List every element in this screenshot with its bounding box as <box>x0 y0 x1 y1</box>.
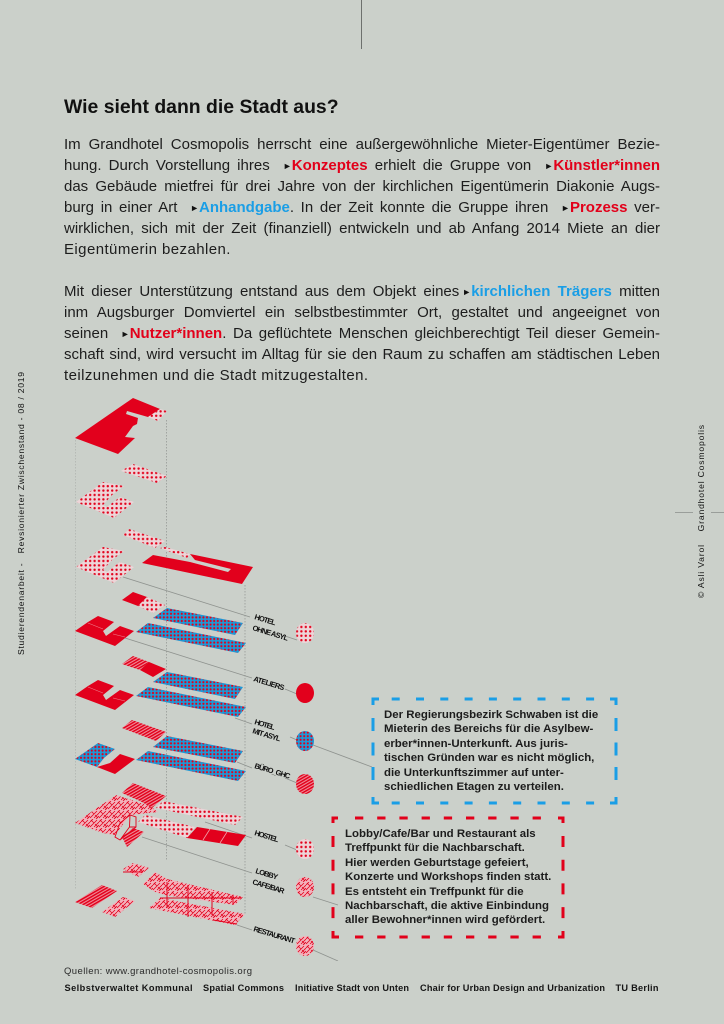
legend labels: BÜRO_GHC <box>253 761 292 781</box>
side note right: © Asli Varol Grandhotel Cosmopolis <box>696 425 706 598</box>
legend labels: LOBBY <box>254 866 279 882</box>
partner list: TU Berlin <box>616 983 659 993</box>
floor: hostel and lobby <box>75 783 246 847</box>
partner list <box>64 983 659 993</box>
text block: first paragraph: wirklichen, sich mit der Zeit (finanziell) entwickeln und ab Anfang 2014 Miete an dier <box>64 220 660 237</box>
callout frame: red <box>333 818 563 937</box>
callout text: Regierungsbezirk Schwaben: schiedlichen Etagen zu verteilen. <box>384 781 564 793</box>
partner list: Selbstverwaltet Kommunal <box>64 983 192 993</box>
callout text: Lobby Cafe Bar <box>345 828 551 926</box>
callout frame: blue <box>373 699 616 803</box>
callout text: Regierungsbezirk Schwaben: die Unterkunftszimmer auf unter- <box>384 767 564 779</box>
legend labels: HOTEL <box>253 717 277 732</box>
callout text: Lobby Cafe Bar: Lobby/Cafe/Bar und Restaurant als <box>345 828 536 840</box>
text block: second paragraph: teilzunehmen und die Stadt mitzugestalten. <box>64 367 368 384</box>
text block: first paragraph: hung. Durch Vorstellung ihres ►Konzeptes erhielt die Gruppe von ►Künstler*innen <box>64 157 660 174</box>
exploded isometric building diagram <box>75 398 372 961</box>
legend labels: MIT ASYL <box>251 726 282 744</box>
callout text: Regierungsbezirk Schwaben <box>384 709 598 793</box>
partner list: Spatial Commons <box>203 983 284 993</box>
text block: second paragraph: schaft sind, wird versucht im Alltag für sie den Raum zu schaffen am städtischen Leben <box>64 346 660 363</box>
floor: dotted <box>76 464 167 518</box>
text block: second paragraph <box>64 283 660 384</box>
callout text: Lobby Cafe Bar: aller Bewohner*innen wird gefördert. <box>345 914 545 926</box>
sources line: Quellen: www.grandhotel-cosmopolis.org <box>64 966 252 977</box>
legend labels: ATELIERS <box>252 674 286 692</box>
legend swatches <box>296 623 314 956</box>
roof level <box>75 398 167 454</box>
callout text: Lobby Cafe Bar: Treffpunkt für die Nachbarschaft. <box>345 842 525 854</box>
legend labels: RESTAURANT <box>252 924 297 946</box>
floor: blue and red wing <box>75 720 246 781</box>
legend labels <box>251 612 297 946</box>
text block: first paragraph: das Gebäude mietfrei für drei Jahre von der kirchlichen Eigentümerin Diakonie Augs- <box>64 178 660 195</box>
text block: first paragraph: burg in einer Art ►Anhandgabe. In der Zeit konnte die Gruppe ihren ►Prozess ver- <box>64 199 660 216</box>
callout text: Regierungsbezirk Schwaben: Der Regierungsbezirk Schwaben ist die <box>384 709 598 721</box>
text block: second paragraph: inm Augsburger Domviertel ein selbstbestimmter Ort, gestaltet und angeeignet von <box>64 304 660 321</box>
floor: hatched wing and blue rooms <box>75 656 246 717</box>
callout text: Regierungsbezirk Schwaben: Mieterin des Bereichs für die Asylbew- <box>384 723 593 735</box>
partner list: Chair for Urban Design and Urbanization <box>420 983 605 993</box>
right tick mark <box>675 512 724 514</box>
callout text: Lobby Cafe Bar: Hier werden Geburtstage gefeiert, <box>345 857 529 869</box>
text block: second paragraph: Mit dieser Unterstützung entstand aus dem Objekt eines ►kirchlichen Trägers mitten <box>64 283 660 300</box>
text block: first paragraph: Eigentümerin bezahlen. <box>64 241 231 258</box>
legend labels: HOSTEL <box>253 828 280 844</box>
legend labels: HOTEL <box>253 612 277 627</box>
callout text: Lobby Cafe Bar: Konzerte und Workshops finden statt. <box>345 871 551 883</box>
floor: dotted with red wing <box>76 529 253 584</box>
legend labels: CAFE/BAR <box>251 877 286 896</box>
callout text: Regierungsbezirk Schwaben: tischen Gründen war es nicht möglich, <box>384 752 594 764</box>
callout text: Lobby Cafe Bar: Nachbarschaft, die aktive Einbindung <box>345 900 549 912</box>
text block: second paragraph: seinen ►Nutzer*innen. Da geflüchtete Menschen gleichberechtigt Teil dieser Gemein- <box>64 325 660 342</box>
title: Wie sieht dann die Stadt aus? <box>64 96 339 118</box>
text block: first paragraph: Im Grandhotel Cosmopolis herrscht eine außergewöhnliche Mieter-Eigentümer Bezie- <box>64 136 660 153</box>
floor: restaurant <box>75 863 245 925</box>
legend labels: OHNE ASYL <box>251 623 290 643</box>
callout text: Lobby Cafe Bar: Es entsteht ein Treffpunkt für die <box>345 886 524 898</box>
vertical guide lines <box>75 420 245 915</box>
side note left: Studierendenarbeit - Revsionierter Zwischenstand - 08 / 2019 <box>16 372 26 655</box>
floor: ateliers and blue rooms <box>75 592 246 653</box>
text block: first paragraph <box>64 136 660 258</box>
top tick mark <box>360 0 362 49</box>
partner list: Initiative Stadt von Unten <box>295 983 409 993</box>
leader lines <box>123 577 372 961</box>
callout text: Regierungsbezirk Schwaben: erber*innen-Unterkunft. Aus juris- <box>384 738 568 750</box>
